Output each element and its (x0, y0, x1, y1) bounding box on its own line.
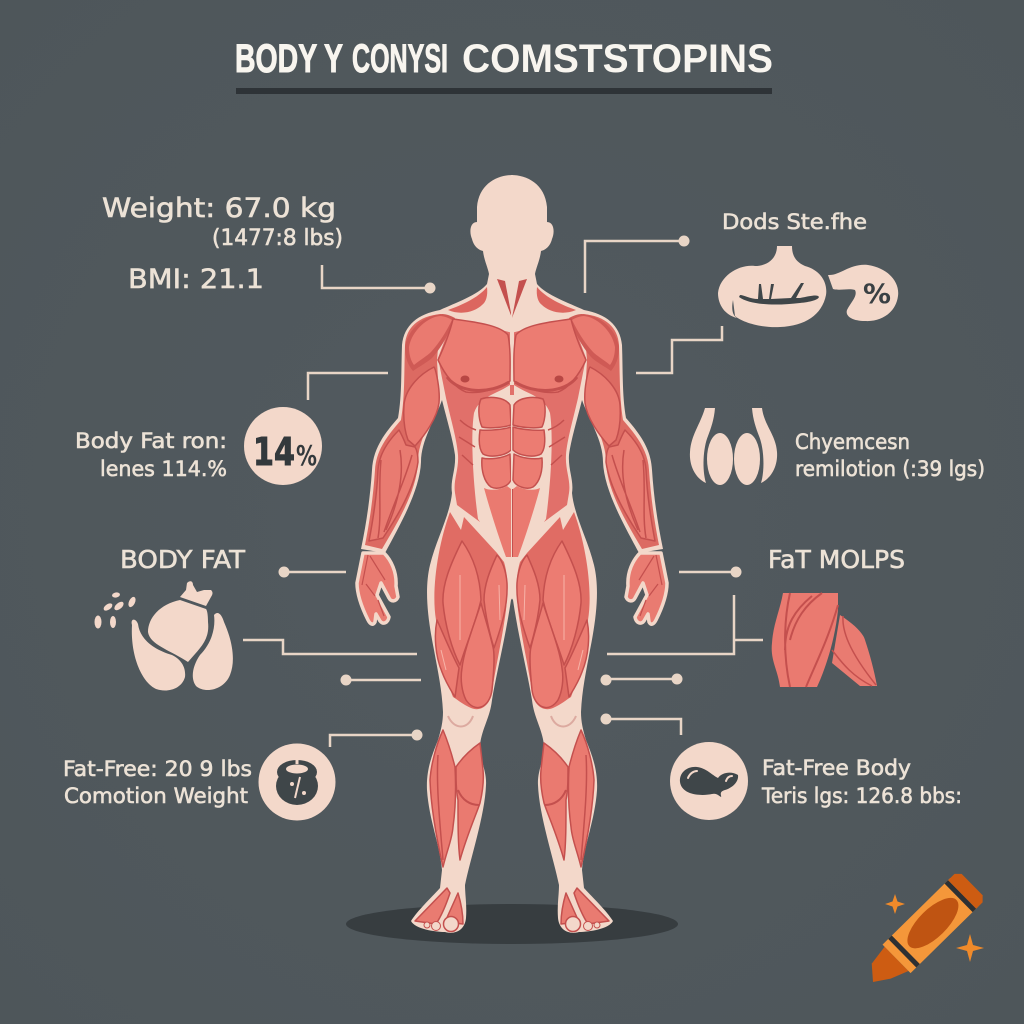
fat-free weight text: Fat-Free: 20 9 lbs (63, 757, 252, 781)
title (235, 37, 773, 94)
title: COMSTSTOPINS (462, 37, 773, 81)
heading: fat molps: FaT MOLPS (768, 545, 905, 574)
icon: stomach with percent: % (863, 279, 891, 310)
weight and BMI text (102, 193, 343, 295)
icon: 14% circle: % (296, 439, 317, 472)
icon: crayon (859, 870, 986, 996)
muscle composition text: remilotion (:39 lgs) (795, 457, 985, 481)
body fat percentage text: Body Fat ron: (75, 429, 227, 453)
icon: sparkles (885, 894, 984, 962)
body fat percentage text (75, 429, 227, 481)
icon: whale in circle (670, 742, 748, 820)
weight and BMI text: BMI: 21.1 (128, 264, 264, 295)
fat-free weight text (63, 757, 252, 808)
title: BODY Y (235, 37, 343, 81)
fat-free body text: Teris lgs: 126.8 bbs: (761, 784, 962, 808)
title: CONYSI (352, 37, 448, 81)
ground shadow (346, 904, 678, 944)
icon: stomach with percent (718, 246, 898, 327)
body figure (357, 175, 667, 933)
muscle composition text: Chyemcesn (795, 430, 910, 454)
weight and BMI text: Weight: 67.0 kg (102, 193, 336, 224)
fat-free body text (761, 756, 962, 808)
connector lines (243, 236, 763, 747)
icon: body fat organ (94, 581, 233, 690)
icon: 14% circle (244, 407, 322, 485)
weight and BMI text: (1477:8 lbs) (212, 226, 343, 251)
fat-free weight text: Comotion Weight (64, 784, 248, 808)
icon: muscle fragment (772, 593, 877, 687)
icon: 14% circle: 14 (253, 430, 295, 474)
fat-free body text: Fat-Free Body (762, 756, 911, 780)
icon: muscle pair shapes (690, 408, 777, 485)
body fat heading: BODY FAT (120, 545, 246, 574)
body fat percentage text: lenes 114.% (100, 457, 227, 481)
muscle composition text (795, 430, 985, 481)
icon: kettlebell (258, 744, 336, 820)
heading: top right label: Dods Ste.fhe (722, 210, 867, 234)
